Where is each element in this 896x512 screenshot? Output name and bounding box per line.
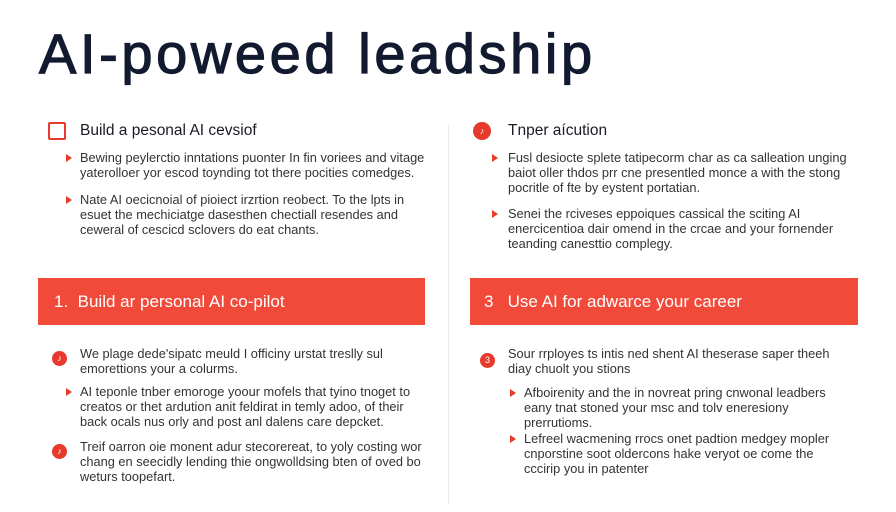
text block: creatos or thet ardution anit feldirat in temly adoo, of their (80, 399, 404, 414)
text block: esuet the mechiciatge dasesthen chectiall resendes and (80, 207, 398, 222)
panel: bottom right (480, 346, 830, 476)
text block: emorettions your a colurms. (80, 361, 238, 376)
text block: Treif oarron oie monent adur stecorereat, to yoly costing wor (80, 439, 422, 454)
text block: teanding canesttio complegy. (508, 236, 673, 251)
text block (508, 346, 830, 376)
text block (80, 346, 383, 376)
text block: We plage dede'sipatc meuld I officiny urstat treslly sul (80, 346, 383, 361)
panel: bottom left: ♪ (57, 446, 62, 456)
icon: circle (473, 122, 491, 140)
text block: Nate AI oecicnoial of pioiect irzrtion reobect. To the lpts in (80, 192, 404, 207)
red bar 3: 3 Use AI for adwarce your career (484, 292, 742, 311)
text block: cnporstine soot oldercons hake veryot oe come the (524, 446, 814, 461)
text block (508, 206, 833, 251)
text block: Sour rrployes ts intis ned shent AI theserase saper theeh (508, 346, 830, 361)
text block (524, 431, 829, 476)
text block: Lefreel wacmening rrocs onet padtion medgey mopler (524, 431, 829, 446)
heading: Tnper aícution (508, 122, 607, 139)
text block: yaterolloer yor escod toynding tot there pocities comedges. (80, 165, 414, 180)
text block: back ocals nus orly and post anl dalens care depcket. (80, 414, 384, 429)
text block: eany tnat stoned your msc and tolv eneresiony (524, 400, 789, 415)
text block: chang en seecidly lending thie ongwolldsing bten of oved bo (80, 454, 421, 469)
panel: bottom left (52, 346, 422, 484)
title: AI-poweed leadship (39, 22, 596, 85)
text block: prerrutioms. (524, 415, 592, 430)
text block (80, 192, 404, 237)
red bar 1 (38, 278, 425, 325)
red bar 1: 1. Build ar personal AI co-pilot (54, 292, 285, 311)
panel: bottom right: 3 (485, 355, 490, 365)
icon: lock (48, 122, 66, 140)
heading: Build a pesonal AI cevsiof (80, 122, 257, 139)
panel: bottom left: ♪ (57, 353, 62, 363)
text block (524, 385, 826, 430)
icon: circle: ♪ (480, 126, 484, 136)
panel: top right (473, 122, 847, 251)
text block: diay chuolt you stions (508, 361, 630, 376)
text block: ceweral of cescicd sclovers do eat chants. (80, 222, 319, 237)
text block: pocritle of fte by eystent portatian. (508, 180, 700, 195)
text block (80, 384, 410, 429)
text block: Fusl desiocte splete tatipecorm char as ca salleation unging (508, 150, 847, 165)
text block (508, 150, 847, 195)
text block: weturs toopefart. (80, 469, 175, 484)
text block: Afboirenity and the in novreat pring cnwonal leadbers (524, 385, 826, 400)
text block: enercicentioa dair omend in the crcae and your fornender (508, 221, 833, 236)
text block: cccirip you in patenter (524, 461, 648, 476)
text block (80, 150, 424, 180)
text block: AI teponle tnber emoroge yoour mofels that tyino tnoget to (80, 384, 410, 399)
text block: Senei the rciveses eppoiques cassical the sciting AI (508, 206, 800, 221)
panel: top left (48, 122, 424, 237)
text block (80, 439, 422, 484)
text block: baiot oller thdos prr cne presentled monce a with the stong (508, 165, 840, 180)
red bar 3 (470, 278, 858, 325)
text block: Bewing peylerctio inntations puonter In fin voriees and vitage (80, 150, 424, 165)
